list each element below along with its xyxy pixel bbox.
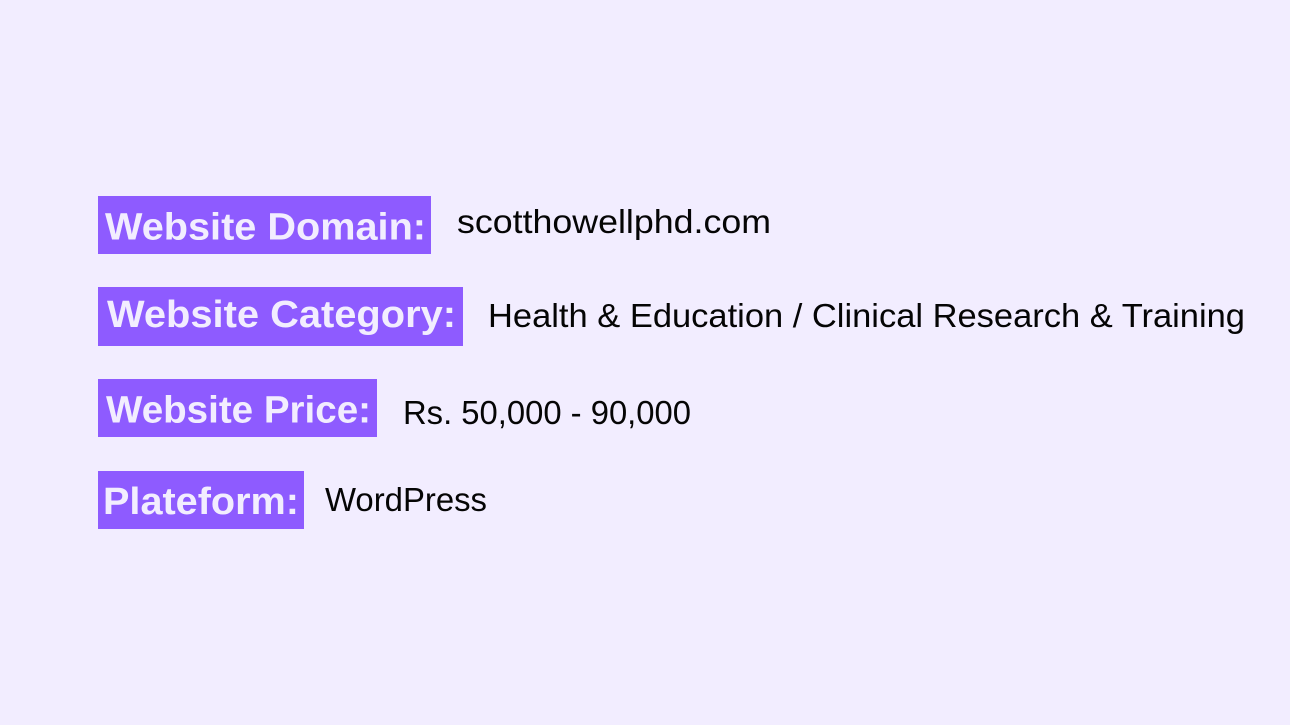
label: website category: Website Category:: [107, 294, 456, 336]
label: website price: Website Price:: [106, 390, 371, 432]
label: platform: Plateform:: [103, 481, 299, 523]
row: website category: [98, 287, 1245, 346]
label: website domain: Website Domain:: [105, 206, 426, 248]
value: domain: scotthowellphd.com: [457, 203, 771, 240]
label: website category: [98, 287, 463, 346]
row: website price: [98, 379, 691, 437]
row: website domain: [98, 196, 771, 254]
value: platform: WordPress: [325, 481, 487, 518]
value: category: Health & Education / Clinical Research & Training: [488, 297, 1245, 334]
label: website price: [98, 379, 377, 437]
row: platform: [98, 471, 487, 529]
label: platform: [98, 471, 304, 529]
value: price: Rs. 50,000 - 90,000: [403, 394, 691, 431]
label: website domain: [98, 196, 431, 254]
